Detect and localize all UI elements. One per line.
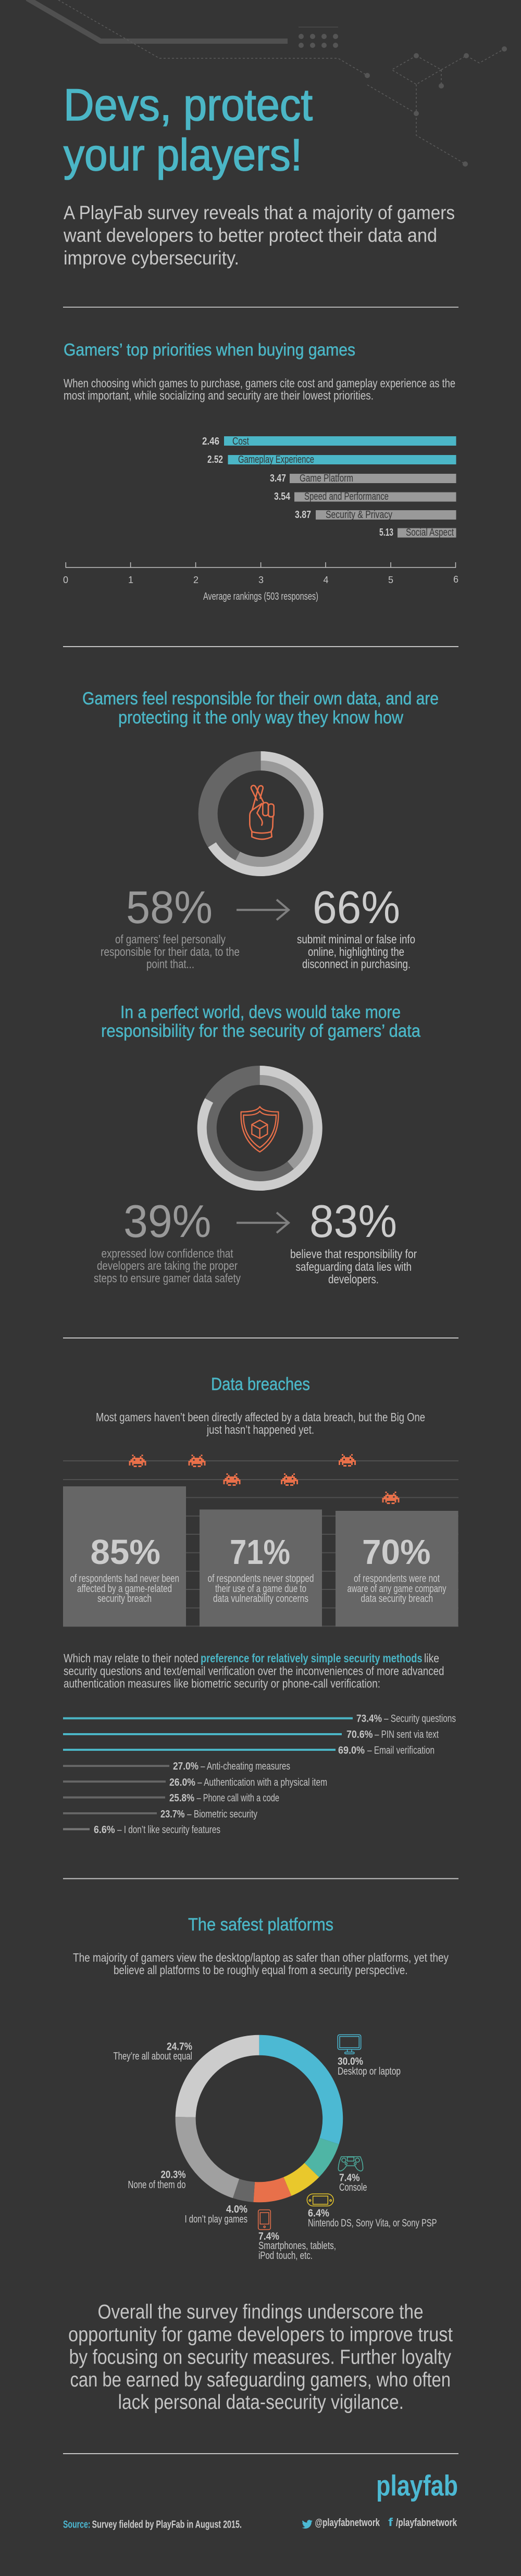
bar: game platform — [270, 473, 456, 484]
bar: security questions: – Security questions — [384, 1713, 456, 1724]
text: security method preference: authentication measures like biometric security or phone-call verification: — [64, 1676, 380, 1690]
intro text — [63, 202, 455, 269]
title — [64, 80, 313, 180]
caption: 58%: point that... — [146, 957, 194, 970]
bar: security and privacy: 3.87 — [295, 509, 311, 521]
icon: shield — [241, 1107, 278, 1152]
label: smartphones: iPod touch, etc. — [258, 2250, 313, 2262]
heading: perfect world — [101, 1003, 420, 1041]
icon: handheld — [307, 2194, 333, 2206]
stat: 58%: 58% — [126, 881, 213, 933]
text: platforms description: The majority of gamers view the desktop/laptop as safer than other platforms, yet they — [73, 1951, 449, 1964]
bar: anti-cheating: – Anti-cheating measures — [201, 1760, 290, 1772]
icon: monitor — [338, 2035, 361, 2054]
icon: twitter — [302, 2520, 313, 2529]
donut: 39% and 83% — [202, 1070, 318, 1186]
text: breaches description: Most gamers haven’t been directly affected by a data breach, but the Big One — [96, 1410, 425, 1424]
text: security method preference: security questions and text/email verification over the inconveniences of more advanced — [64, 1664, 444, 1677]
social links: @playfabnetwork — [315, 2517, 380, 2529]
intro text: improve cybersecurity. — [64, 247, 239, 269]
bar: biometric — [63, 1808, 258, 1820]
label: smartphones: 7.4% — [258, 2230, 279, 2242]
panel: 85% breach stat: security breach — [97, 1593, 152, 1605]
label: don't play games — [184, 2203, 247, 2225]
bar: security and privacy — [295, 509, 456, 521]
bar: phone call — [63, 1792, 279, 1804]
title: Devs, protect — [64, 80, 313, 130]
text: conclusion — [68, 2301, 453, 2414]
text: breaches description: just hasn’t happened yet. — [206, 1423, 314, 1436]
bar: social aspect: Social Aspect — [406, 527, 454, 538]
stat: 39%: 39% — [123, 1195, 212, 1247]
text: conclusion: opportunity for game developers to improve trust — [68, 2324, 453, 2346]
label: console — [339, 2172, 367, 2193]
bar: no security features: 6.6% — [94, 1824, 115, 1836]
panel: 70% breach stat: 70% — [362, 1533, 430, 1572]
bar: speed and performance — [274, 491, 456, 502]
panel: 70% breach stat: data security breach — [361, 1593, 433, 1605]
bar: social aspect: 5.13 — [379, 527, 393, 538]
heading: gamers feel responsible — [82, 689, 439, 728]
caption: 58% — [101, 932, 240, 970]
bar: anti-cheating: 27.0% — [173, 1760, 199, 1772]
arrow — [237, 1213, 289, 1233]
label: desktop or laptop — [338, 2055, 401, 2077]
chart axis: 1 — [128, 575, 133, 585]
panel: 85% breach stat: 85% — [91, 1533, 160, 1572]
text: conclusion: lack personal data-security vigilance. — [118, 2391, 404, 2414]
chart axis: 4 — [323, 575, 329, 585]
bar: cost: 2.46 — [202, 436, 219, 447]
heading: gamers feel responsible: Gamers feel responsible for their own data, and are — [82, 689, 439, 709]
bar: physical item: 26.0% — [169, 1776, 195, 1788]
icon: crossed fingers — [250, 786, 274, 839]
panel: 70% breach stat: of respondents were not — [354, 1572, 440, 1585]
stat: 83%: 83% — [309, 1195, 397, 1247]
text: security method preference: Which may relate to their noted — [64, 1651, 199, 1665]
bar: email verification: – Email verification — [367, 1744, 435, 1757]
text: priorities description — [64, 376, 455, 402]
bar: physical item — [63, 1776, 327, 1788]
caption: 83%: safeguarding data lies with — [296, 1260, 412, 1273]
label: console: Console — [339, 2181, 367, 2193]
bar: game platform: Game Platform — [300, 473, 353, 484]
bar: phone call: 25.8% — [169, 1792, 194, 1804]
caption: 39%: expressed low confidence that — [101, 1246, 233, 1260]
text: platforms description — [73, 1951, 449, 1977]
text: conclusion: Overall the survey findings underscore the — [98, 2301, 423, 2323]
bar: PIN sent via text: 70.6% — [346, 1728, 373, 1740]
bar: PIN sent via text: – PIN sent via text — [375, 1728, 439, 1740]
panel: 70% breach stat: aware of any game company — [347, 1583, 446, 1595]
bar: security questions: 73.4% — [356, 1713, 382, 1724]
heading: perfect world: In a perfect world, devs would take more — [120, 1003, 401, 1022]
bar: social aspect — [379, 527, 456, 538]
text: conclusion: can be earned by safeguarding gamers, who often — [70, 2369, 451, 2391]
intro text: want developers to better protect their data and — [63, 225, 437, 246]
arrow — [237, 900, 289, 920]
text: conclusion: by focusing on security measures. Further loyalty — [69, 2346, 451, 2369]
label: don't play games: I don’t play games — [184, 2213, 247, 2225]
bar: cost — [202, 436, 456, 447]
chart axis — [63, 562, 458, 602]
text: security method preference: preference for relatively simple security methods — [201, 1651, 422, 1665]
social links: /playfabnetwork — [396, 2517, 457, 2529]
text: security method preference: like — [424, 1651, 439, 1665]
bar: no security features — [63, 1824, 220, 1836]
panel: 85% breach stat: affected by a game-related — [77, 1583, 172, 1595]
panel: 71% breach stat: data vulnerability concerns — [213, 1593, 308, 1605]
icon: invaders — [129, 1454, 399, 1504]
donut chart: platforms — [185, 2045, 333, 2192]
label: handheld consoles: 6.4% — [308, 2207, 329, 2219]
bar: gameplay experience: 2.52 — [207, 454, 223, 465]
text: priorities description: most important, while socializing and security are their lowest priorities. — [64, 388, 374, 402]
bar: gameplay experience — [207, 454, 456, 465]
label: all about equal: 24.7% — [167, 2041, 192, 2052]
label: all about equal — [114, 2041, 192, 2062]
logo: playfab: playfab — [376, 2469, 458, 2502]
bar: gameplay experience: Gameplay Experience — [238, 454, 314, 465]
chart axis: 5 — [388, 575, 393, 585]
label: handheld consoles — [308, 2207, 437, 2229]
text: security method preference — [64, 1651, 444, 1690]
label: smartphones — [258, 2230, 336, 2262]
chart axis: 2 — [193, 575, 199, 585]
bar: biometric: 23.7% — [160, 1808, 184, 1820]
bar: security and privacy: Security & Privacy — [326, 509, 392, 521]
heading: data breaches: Data breaches — [211, 1374, 310, 1394]
icon: console controller — [338, 2157, 363, 2171]
caption: 83% — [290, 1247, 417, 1286]
bar: speed and performance: Speed and Performance — [304, 491, 389, 502]
caption: 66%: submit minimal or false info — [297, 932, 415, 946]
intro text: A PlayFab survey reveals that a majority of gamers — [64, 202, 455, 223]
label: desktop or laptop: Desktop or laptop — [338, 2065, 401, 2077]
bar: anti-cheating — [63, 1760, 290, 1772]
caption: 58%: responsible for their data, to the — [101, 945, 240, 958]
text: platforms description: believe all platforms to be roughly equal from a security perspective. — [114, 1963, 407, 1977]
heading: top priorities: Gamers’ top priorities when buying games — [64, 340, 355, 359]
heading: gamers feel responsible: protecting it the only way they know how — [118, 708, 403, 728]
chart axis: 3 — [258, 575, 264, 585]
bar: speed and performance: 3.54 — [274, 491, 291, 502]
caption: 58%: of gamers’ feel personally — [115, 932, 226, 946]
panel: 70% breach stat — [336, 1511, 458, 1626]
caption: 39%: developers are taking the proper — [97, 1259, 238, 1272]
label: none of them: None of them do — [128, 2179, 185, 2191]
panel: 85% breach stat — [63, 1486, 186, 1626]
chart axis: 6 — [453, 574, 458, 585]
bar: phone call: – Phone call with a code — [197, 1792, 279, 1804]
source — [63, 2519, 242, 2530]
panel: 71% breach stat: their use of a game due to — [215, 1583, 306, 1595]
label: desktop or laptop: 30.0% — [338, 2055, 363, 2067]
label: none of them — [128, 2169, 185, 2191]
label: handheld consoles: Nintendo DS, Sony Vita, or Sony PSP — [308, 2217, 437, 2229]
icon: phone — [258, 2210, 270, 2230]
label: all about equal: They’re all about equal — [114, 2050, 192, 2062]
donut: 58% and 66% — [203, 756, 319, 872]
chart: security method bars — [63, 1713, 456, 1836]
social links — [302, 2516, 457, 2529]
caption: 66%: online, highlighting the — [308, 945, 404, 958]
caption: 66% — [297, 932, 415, 970]
panel: 71% breach stat — [200, 1510, 322, 1626]
bar: no security features: – I don’t like security features — [117, 1824, 220, 1836]
caption: 39% — [94, 1246, 241, 1285]
social links: f — [388, 2516, 393, 2529]
source: Source: — [63, 2519, 91, 2530]
stat: 66%: 66% — [313, 881, 400, 933]
caption: 83%: developers. — [328, 1272, 379, 1286]
bar: game platform: 3.47 — [270, 473, 286, 484]
label: none of them: 20.3% — [160, 2169, 185, 2180]
source: Survey fielded by PlayFab in August 2015. — [92, 2519, 242, 2530]
bar: email verification — [63, 1744, 435, 1757]
chart axis: Average rankings (503 responses) — [203, 591, 318, 602]
label: don't play games: 4.0% — [226, 2203, 247, 2215]
panel: 71% breach stat: 71% — [230, 1533, 290, 1572]
panel: 85% breach stat: of respondents had never been — [70, 1572, 179, 1585]
bar: PIN sent via text — [63, 1728, 439, 1740]
label: smartphones: Smartphones, tablets, — [258, 2240, 336, 2252]
heading: perfect world: responsibility for the security of gamers’ data — [101, 1021, 420, 1041]
caption: 66%: disconnect in purchasing. — [302, 957, 411, 970]
title: your players! — [64, 130, 302, 180]
panel: 71% breach stat: of respondents never stopped — [207, 1572, 314, 1585]
caption: 39%: steps to ensure gamer data safety — [94, 1271, 241, 1285]
bar: email verification: 69.0% — [338, 1744, 365, 1757]
bar: cost: Cost — [232, 436, 249, 447]
heading: safest platforms: The safest platforms — [188, 1915, 333, 1935]
bar: biometric: – Biometric security — [187, 1808, 258, 1820]
chart axis: 0 — [63, 575, 68, 585]
bar: security questions — [63, 1713, 456, 1724]
caption: 83%: believe that responsibility for — [290, 1247, 417, 1261]
bar chart: average rankings — [202, 436, 456, 538]
label: console: 7.4% — [339, 2172, 359, 2183]
bar: physical item: – Authentication with a physical item — [197, 1776, 327, 1788]
text: breaches description — [96, 1410, 425, 1436]
